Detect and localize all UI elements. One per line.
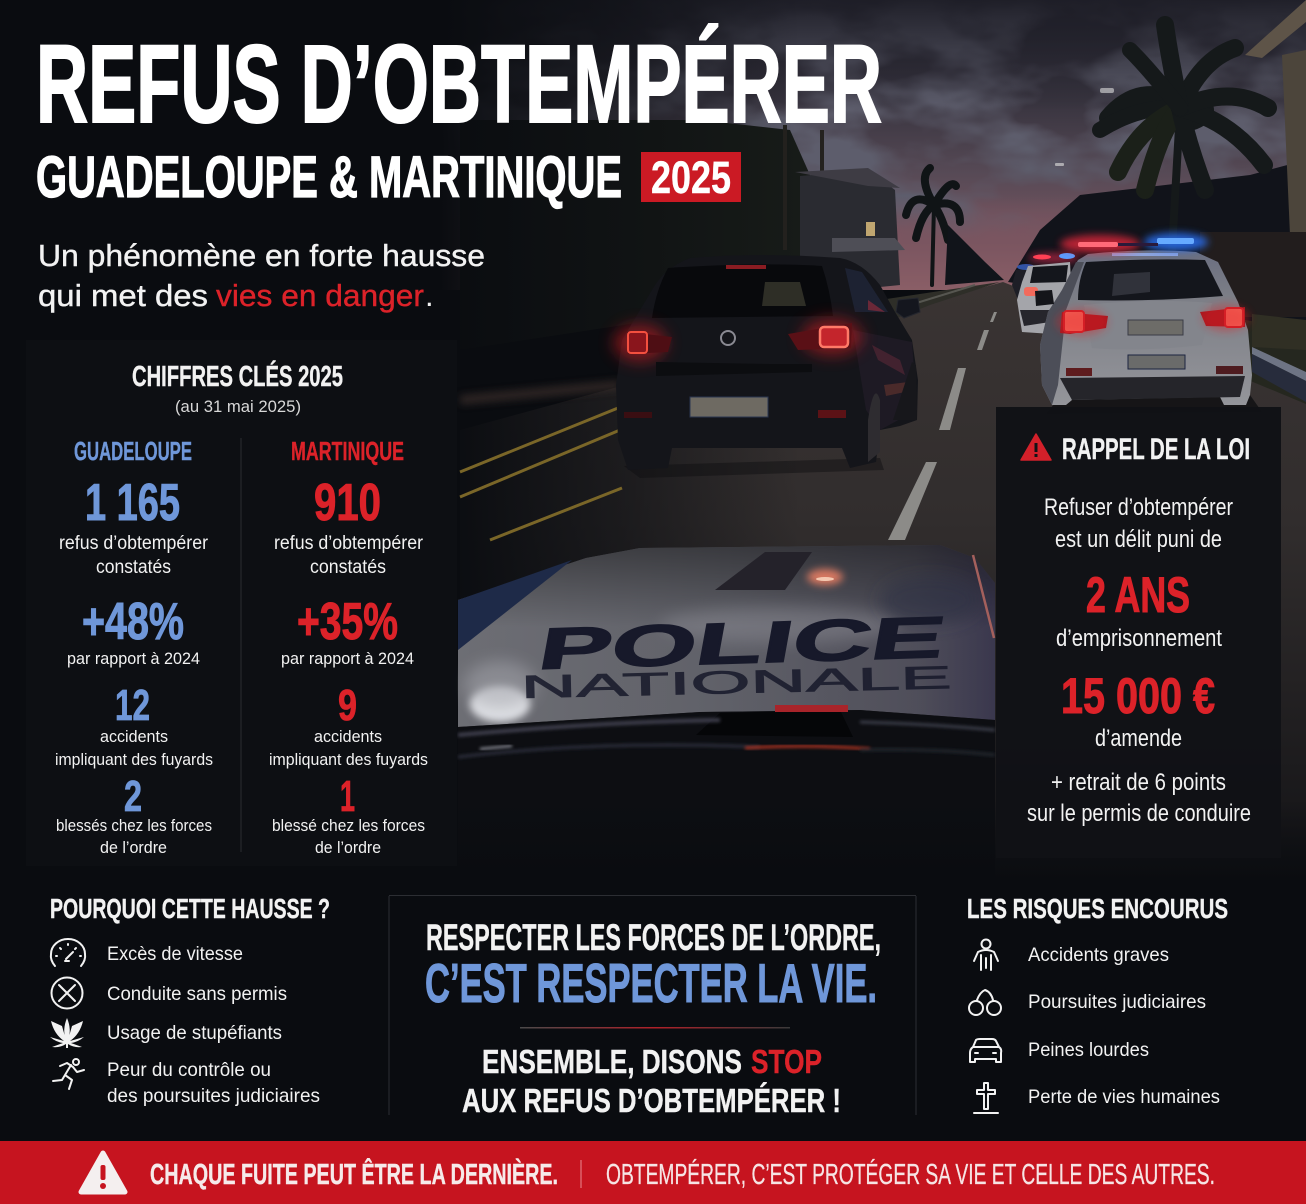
column: Guadeloupe: +48% bbox=[82, 593, 184, 651]
panel: pourquoi cette hausse bbox=[50, 893, 330, 1107]
bottom fade of the photo bbox=[440, 800, 1306, 882]
tagline: vies en danger bbox=[216, 278, 424, 313]
column: Guadeloupe: par rapport à 2024 bbox=[67, 649, 200, 668]
panel: pourquoi cette hausse: POURQUOI CETTE HAUSSE ? bbox=[50, 893, 330, 924]
panel: rappel de la loi: + retrait de 6 points bbox=[1051, 769, 1226, 796]
panel: rappel de la loi: d’emprisonnement bbox=[1056, 625, 1222, 652]
panel: central message: RESPECTER LES FORCES DE L’ORDRE, bbox=[426, 917, 881, 958]
icon: speedometer bbox=[51, 939, 85, 966]
rear window bbox=[1078, 259, 1223, 300]
hood lettering: POLICE bbox=[534, 605, 950, 682]
icon: cannabis leaf bbox=[50, 1018, 84, 1048]
side panel bbox=[853, 330, 917, 430]
column: Martinique: 9 bbox=[338, 681, 357, 730]
column: Martinique: par rapport à 2024 bbox=[281, 649, 414, 668]
column: Guadeloupe: 2 bbox=[124, 772, 142, 821]
icon: car bbox=[970, 1039, 1001, 1062]
column: Martinique: constatés bbox=[310, 557, 386, 578]
fleeing black car bbox=[614, 255, 920, 478]
plates bbox=[1128, 320, 1183, 335]
text: peur du contrôle: des poursuites judiciaires bbox=[107, 1085, 320, 1107]
tail lights bbox=[614, 319, 862, 361]
column: Martinique: refus d’obtempérer bbox=[274, 533, 424, 554]
villa bbox=[795, 168, 905, 295]
panel: rappel de la loi: est un délit puni de bbox=[1055, 526, 1222, 553]
tagline: . bbox=[425, 278, 434, 313]
column: Guadeloupe bbox=[55, 436, 213, 857]
panel: rappel de la loi: Refuser d’obtempérer bbox=[1044, 494, 1233, 521]
tagline: Un phénomène en forte hausse bbox=[38, 238, 485, 273]
panel: rappel de la loi: sur le permis de conduire bbox=[1027, 800, 1251, 827]
police car bbox=[1035, 233, 1262, 414]
icon: handcuffs bbox=[969, 990, 1001, 1015]
tree wall left bbox=[460, 120, 820, 350]
large palm bbox=[1100, 25, 1268, 250]
column: Martinique: MARTINIQUE bbox=[291, 436, 404, 466]
column: Martinique bbox=[269, 436, 428, 857]
subtitle: GUADELOUPE & MARTINIQUE bbox=[36, 145, 622, 210]
column: Martinique: blessé chez les forces bbox=[272, 816, 425, 835]
rear window bbox=[652, 264, 833, 318]
tagline bbox=[38, 238, 485, 313]
centre dashes bbox=[888, 312, 997, 540]
icon: runner bbox=[53, 1059, 84, 1089]
police hood foreground bbox=[458, 545, 995, 880]
text: peur du contrôle: Peur du contrôle ou bbox=[107, 1059, 271, 1081]
wheels bbox=[868, 393, 880, 462]
tagline: qui met des bbox=[38, 278, 208, 313]
column: Martinique: de l’ordre bbox=[315, 838, 381, 857]
panel: central message bbox=[389, 896, 916, 1119]
panel: rappel de la loi: 2 ANS bbox=[1086, 567, 1190, 623]
column: Guadeloupe: 12 bbox=[115, 681, 150, 730]
panel: central message: ENSEMBLE, DISONS bbox=[482, 1043, 742, 1080]
panel: rappel de la loi bbox=[996, 407, 1281, 858]
distant trees bbox=[945, 225, 1004, 285]
column: Guadeloupe: de l’ordre bbox=[100, 838, 167, 857]
column: Martinique: impliquant des fuyards bbox=[269, 750, 428, 769]
icon: injured person bbox=[974, 940, 998, 970]
column: Guadeloupe: refus d’obtempérer bbox=[59, 533, 209, 554]
tail lights bbox=[1056, 304, 1250, 336]
column: Guadeloupe: 1 165 bbox=[85, 474, 180, 532]
footer banner: CHAQUE FUITE PEUT ÊTRE LA DERNIÈRE. bbox=[150, 1157, 558, 1191]
column: Guadeloupe: accidents bbox=[100, 727, 168, 746]
title: REFUS D’OBTEMPÉRER bbox=[36, 23, 882, 146]
panel: les risques encourus: Accidents graves bbox=[1028, 944, 1169, 966]
side windows bbox=[845, 268, 888, 312]
column: Martinique: accidents bbox=[314, 727, 382, 746]
panel: pourquoi cette hausse: Conduite sans permis bbox=[107, 983, 287, 1005]
column: Guadeloupe: impliquant des fuyards bbox=[55, 750, 213, 769]
column: Martinique: 1 bbox=[340, 772, 355, 821]
column: Martinique: 910 bbox=[314, 474, 381, 532]
yellow lane lines bbox=[460, 408, 622, 540]
small palm bbox=[906, 168, 960, 285]
panel: rappel de la loi: d’amende bbox=[1095, 725, 1182, 752]
panel: pourquoi cette hausse: Excès de vitesse bbox=[107, 943, 243, 965]
panel: les risques encourus: Poursuites judiciaires bbox=[1028, 991, 1206, 1013]
windscreen base bbox=[458, 710, 995, 880]
column: Martinique: +35% bbox=[297, 593, 398, 651]
hood lettering: NATIONALE bbox=[520, 659, 952, 705]
right house bbox=[1282, 50, 1306, 240]
mirror bbox=[896, 298, 920, 318]
panel: central message: C’EST RESPECTER LA VIE. bbox=[425, 952, 877, 1014]
road surface bbox=[460, 282, 1306, 880]
year badge: 2025 bbox=[651, 152, 731, 203]
text: peur du contrôle bbox=[107, 1059, 320, 1107]
third distant car bbox=[1012, 264, 1035, 300]
panel heading: (au 31 mai 2025) bbox=[175, 397, 301, 416]
footer banner bbox=[0, 1141, 1306, 1204]
panel: les risques encourus: Perte de vies humaines bbox=[1028, 1086, 1220, 1108]
column: Guadeloupe: GUADELOUPE bbox=[74, 436, 192, 466]
panel: les risques encourus: Peines lourdes bbox=[1028, 1039, 1149, 1061]
hood lettering bbox=[520, 605, 952, 705]
panel: rappel de la loi: 15 000 € bbox=[1061, 668, 1215, 724]
panel: les risques encourus bbox=[967, 893, 1228, 1113]
column: Guadeloupe: blessés chez les forces bbox=[56, 816, 212, 835]
second police car bbox=[1017, 253, 1080, 334]
icon: warning triangle bbox=[81, 1153, 125, 1192]
boot shading bbox=[1084, 301, 1212, 349]
column: Guadeloupe: constatés bbox=[96, 557, 171, 578]
panel: central message: STOP bbox=[751, 1043, 822, 1080]
panel: pourquoi cette hausse: Usage de stupéfiants bbox=[107, 1022, 282, 1044]
panel: central message: AUX REFUS D’OBTEMPÉRER ! bbox=[462, 1082, 841, 1119]
icon: warning triangle bbox=[1021, 434, 1051, 460]
dark left fade bbox=[0, 0, 800, 620]
icon: cross bbox=[974, 1083, 998, 1113]
panel: chiffres clés 2025 bbox=[26, 340, 457, 866]
light bar bbox=[1060, 233, 1208, 253]
panel heading: CHIFFRES CLÉS 2025 bbox=[132, 359, 343, 393]
panel heading bbox=[132, 359, 343, 416]
icon: no licence bbox=[52, 978, 82, 1008]
